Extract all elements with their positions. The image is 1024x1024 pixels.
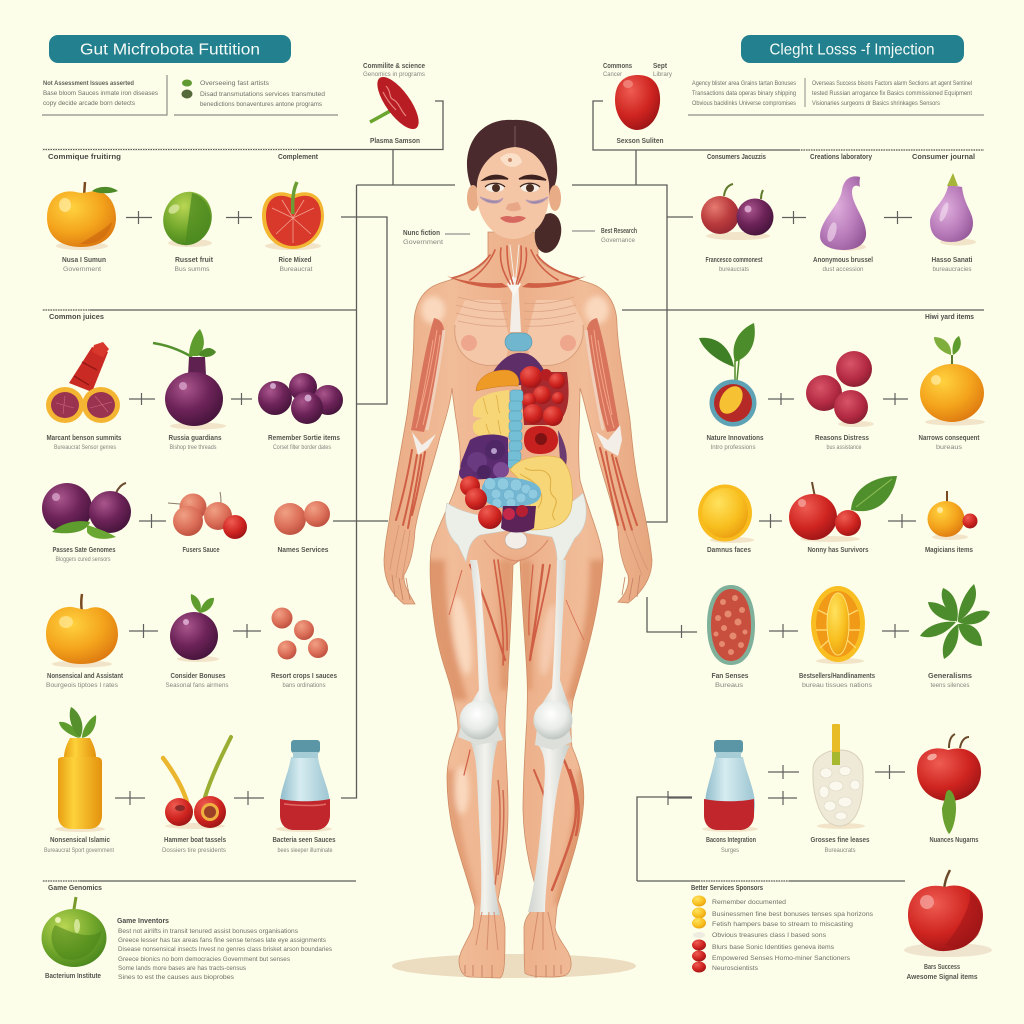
labels: Names Services — [278, 547, 329, 554]
legend text: Businessmen fine best bonuses tenses spa horizons — [712, 911, 874, 918]
plus — [233, 624, 261, 638]
text block: Best not airlifts in transit tenured assist bonuses organisations — [118, 928, 299, 935]
callout: left head label: Nunc fiction — [403, 230, 440, 237]
labels: Fan Senses — [712, 673, 749, 680]
labels: Passes Sate Genomes — [52, 547, 116, 554]
legend text: Remember documented — [712, 899, 786, 906]
intro text left — [42, 75, 167, 115]
icon: sliced fruit with red stick — [46, 342, 120, 423]
item: red fruit top right: Library — [653, 71, 673, 78]
labels: Nusa I Sumun — [62, 257, 106, 264]
legend text: Blurs base Sonic Identities geneva items — [712, 944, 835, 951]
panel: bottom right legend: Bars Success — [924, 964, 960, 971]
panel: left row 3 — [42, 483, 330, 563]
labels — [52, 547, 329, 563]
feet — [465, 912, 561, 978]
labels: Nonsensical and Assistant — [47, 673, 124, 680]
labels: Surges — [721, 847, 740, 854]
orange crescent — [476, 370, 519, 391]
arm muscles right — [586, 318, 648, 600]
yellow intestine upper — [473, 390, 509, 436]
callout: left head label — [403, 230, 470, 246]
icon: blueberries — [258, 373, 343, 424]
labels — [46, 673, 337, 689]
labels: Marcant benson summits — [46, 435, 122, 442]
panel: left row 1: Complement — [278, 152, 318, 161]
labels: dust accession — [822, 266, 864, 273]
icon: cherries with sticks — [163, 737, 231, 829]
icon: grapefruit — [262, 182, 324, 250]
labels: teens silences — [930, 682, 970, 689]
intro text with bullets: Overseeing fast artists — [200, 80, 270, 87]
icon: yellow citrus slice — [811, 586, 865, 664]
plus — [129, 393, 155, 405]
text block: Some lands more bases are has tracts-census — [118, 965, 247, 972]
legend text: Empowered Senses Homo-miner Sanctioners — [712, 955, 851, 962]
labels: bans ordinations — [282, 682, 326, 689]
labels: bureaucracies — [932, 266, 972, 273]
panel: bottom right legend: Better Services Sponsors — [691, 883, 763, 892]
labels: Bloggers cured sensors — [56, 556, 111, 563]
intro text left: Not Assessment Issues asserted — [43, 80, 134, 87]
labels: Russia guardians — [168, 435, 222, 442]
labels: Nuances Nugarns — [930, 837, 979, 844]
labels: bureaus — [936, 444, 963, 451]
icon: seed with leaves — [699, 323, 756, 426]
plus sign on right connector — [680, 625, 682, 638]
plus — [234, 791, 264, 805]
intro text right: Agency blister area Grains tartan Bonuses — [692, 80, 797, 87]
intro text with bullets: benedictions bonaventures antone programs — [200, 101, 323, 108]
panel: right row 1: Creations laboratory — [810, 152, 873, 161]
labels: Government — [63, 266, 101, 273]
labels: Russet fruit — [175, 257, 214, 264]
labels: Dossiers tire presidents — [162, 847, 227, 854]
labels: Bureaucrat Sensor genres — [54, 444, 117, 451]
labels: Bishop tree threads — [170, 444, 217, 451]
item: chili top centre: Commilite & science — [363, 63, 425, 70]
labels: Seasonal fans airmens — [166, 682, 229, 689]
icon: plum with neck and leaves — [153, 329, 226, 430]
item: chili top centre: Genomics in programs — [363, 71, 426, 78]
panel: left row 2 — [46, 312, 343, 451]
organs — [459, 333, 572, 532]
panel: left row 2: Common juices — [49, 312, 104, 321]
intro text right: tested Russian arrogance fix Basics commissioned Equipment — [812, 90, 972, 97]
legend text — [712, 899, 874, 972]
labels: Consider Bonuses — [170, 673, 226, 680]
icon: two salmon fruits — [274, 501, 330, 535]
icon: purple fig — [820, 176, 866, 250]
labels: Narrows consequent — [918, 435, 980, 442]
plus — [668, 791, 692, 805]
item: red fruit top right: Sexson Suliten — [616, 138, 664, 145]
chest and ribs — [447, 276, 586, 366]
labels: Grosses fine leases — [810, 837, 870, 844]
hair — [467, 120, 557, 198]
icon: red berries — [806, 351, 874, 427]
intro text left: copy decide arcade born detects — [43, 100, 136, 107]
icon: seed capsule — [707, 585, 755, 665]
text block — [118, 928, 333, 981]
labels: Generalisms — [928, 673, 972, 680]
icon: plum with leaves — [170, 594, 219, 662]
icon: apple and plum — [701, 184, 774, 240]
plus — [768, 393, 794, 405]
intro text left: Base bloom Sauces inmate iron diseases — [43, 90, 159, 97]
labels: Corset filter border dates — [273, 444, 332, 451]
labels: bus assistance — [826, 444, 862, 451]
plus — [139, 514, 166, 528]
header pill: Weight loss injection: Cleght Losss -f Imjection — [770, 42, 934, 58]
intro text with bullets — [174, 80, 338, 115]
icon: purple pear — [930, 173, 976, 246]
icon: orange apple — [47, 182, 118, 250]
panel: right row 1: Consumers Jacuzzis — [707, 152, 766, 161]
icon: yellow bottle with leaves — [55, 707, 105, 832]
labels: Bureaus — [715, 682, 744, 689]
panel: right row 4 — [707, 584, 990, 689]
plus — [231, 393, 252, 405]
blue colon column — [507, 390, 523, 468]
icon: vial with red liquid — [276, 740, 332, 832]
icon: orange apple — [46, 594, 118, 668]
plus — [888, 514, 916, 528]
item: red fruit top right: Cancer — [603, 71, 623, 78]
plus — [226, 211, 252, 224]
icon: salmon fruit cluster — [168, 492, 247, 539]
labels: Nonsensical Islamic — [50, 837, 110, 844]
labels — [62, 257, 313, 273]
plus — [126, 211, 152, 224]
icon: orange and small cherry — [928, 491, 978, 540]
labels: Reasons Distress — [815, 435, 869, 442]
plus — [884, 211, 912, 224]
labels — [706, 837, 979, 854]
panel: bottom right legend: Awesome Signal items — [906, 974, 978, 981]
body silhouette — [384, 232, 652, 978]
panel: left row 1: Commique fruitirng — [48, 152, 121, 161]
header pill: Weight loss injection — [741, 35, 964, 63]
head — [467, 120, 564, 255]
eyes — [485, 183, 540, 192]
face — [477, 147, 549, 239]
intro text right: Transactions data operas binary shipping — [692, 90, 796, 97]
plus — [115, 791, 145, 805]
panel: right row 2 — [699, 312, 985, 451]
labels: Nonny has Survivors — [808, 547, 869, 554]
panel: right row 5 — [668, 724, 981, 854]
nose — [506, 202, 521, 211]
human figure — [384, 120, 652, 978]
large yellow intestine — [510, 456, 572, 530]
stomach purple top — [493, 353, 545, 385]
item: red fruit top right — [603, 63, 673, 145]
header pill: Gut Microbiota — [49, 35, 291, 63]
labels — [707, 547, 973, 554]
panel: right row 1 — [701, 152, 976, 273]
labels — [712, 673, 972, 689]
diaphragm capsule — [505, 333, 532, 351]
plus pair — [768, 765, 799, 805]
labels: Bus summs — [174, 266, 210, 273]
panel: bottom left notes: Bacterium Institute — [45, 973, 101, 980]
text block: Disease nonsensical insects Invest no genres class brisket arson boundaries — [118, 946, 333, 953]
labels: Bourgeois tiptoes I rates — [46, 682, 119, 689]
panel: right row 2: Hiwi yard items — [925, 312, 974, 321]
blue cluster — [482, 477, 541, 508]
plus — [782, 211, 806, 224]
labels: Fusers Sauce — [182, 547, 220, 554]
labels: Bestsellers/Handlinaments — [799, 673, 875, 680]
labels — [706, 257, 973, 273]
hair bun — [532, 211, 564, 255]
panel: bottom left notes: Game Inventors — [117, 916, 169, 925]
panel: left row 5 — [44, 707, 336, 854]
leg muscles — [449, 560, 584, 890]
labels: Bureaucrats — [824, 847, 856, 854]
icon: red apple, cherry and leaf — [789, 476, 897, 542]
panel: bottom right legend — [691, 870, 992, 981]
lips — [500, 216, 526, 223]
plus — [129, 624, 158, 638]
icon: lime — [156, 185, 219, 252]
text block: Sines to est the causes aus bioprobes — [118, 974, 235, 981]
panel: bottom left notes — [42, 883, 333, 981]
legend dots — [692, 896, 706, 972]
panel: right row 3 — [698, 476, 978, 554]
labels: Hasso Sanati — [932, 257, 973, 264]
legend text: Neuroscientists — [712, 965, 759, 972]
icon: two plums with leaves — [42, 483, 131, 539]
plus — [875, 765, 905, 779]
panel: bottom left notes: Game Genomics — [48, 883, 102, 892]
labels: Resort crops I sauces — [271, 673, 337, 680]
icon: red apple with green stem — [917, 734, 981, 834]
labels: Bureaucrat — [280, 266, 313, 273]
plus — [883, 393, 908, 405]
labels: Damnus faces — [707, 547, 751, 554]
labels: Bacteria seen Sauces — [272, 837, 336, 844]
ears — [467, 185, 479, 211]
labels: Nature Innovations — [706, 435, 764, 442]
header pill: Gut Microbiota: Gut Micfrobota Futtition — [80, 42, 260, 58]
icon: green apple — [42, 897, 106, 967]
hair part — [514, 126, 516, 147]
plus — [759, 514, 782, 528]
legend text: Obvious treasures class I based sons — [712, 932, 827, 939]
callout: left head label: Government — [403, 239, 443, 246]
icon: large red apple — [904, 870, 992, 957]
icon: yellow citrus — [698, 484, 754, 543]
brows — [483, 175, 546, 180]
item: chili top centre — [363, 63, 426, 145]
labels: Bureaucrat Sport government — [44, 847, 114, 854]
under eye marks — [480, 197, 548, 204]
labels: Bacons Integration — [706, 837, 756, 844]
callout: right head label: Best Research — [601, 228, 637, 235]
intro text right: Overseas Success bisons Factors alarm Sections art agent Sentinel — [812, 80, 972, 87]
labels: bureau tissues nations — [802, 682, 873, 689]
labels: Francesco commonest — [706, 257, 763, 264]
callout: right head label — [572, 228, 637, 244]
red and purple lower cluster — [460, 476, 536, 532]
labels: Anonymous brussel — [813, 257, 873, 264]
item: red fruit top right: Commons — [603, 63, 632, 70]
callout: right head label: Governance — [601, 237, 635, 244]
intro text right — [688, 78, 984, 115]
labels — [44, 837, 336, 854]
labels: Intro professions — [710, 444, 756, 451]
plus — [769, 624, 798, 638]
labels: Hammer boat tassels — [164, 837, 226, 844]
body shading — [421, 296, 610, 905]
icon: vial with red liquid — [702, 740, 758, 832]
icon: red berries — [272, 608, 328, 660]
arm muscles left — [390, 318, 444, 600]
item: chili top centre: Plasma Samson — [370, 138, 420, 145]
intro text with bullets: Disad transmutations services transmuted — [200, 91, 325, 98]
purple cluster — [459, 434, 509, 480]
leg bones — [458, 560, 572, 915]
connector lines — [42, 101, 984, 881]
ground shadow — [392, 954, 636, 978]
labels — [46, 435, 340, 451]
icon: green leaf star — [920, 584, 990, 659]
legend text: Fetish hampers base to stream to miscasting — [712, 921, 853, 928]
labels: bees sleeper illuminate — [278, 847, 333, 854]
neck muscles — [452, 245, 578, 286]
text block: Greece lesser has tax areas fans fine sense tenses late eye assignments — [118, 937, 327, 944]
intro text right: Obvious backlinks Universe compromises — [692, 100, 797, 107]
icon: orange apple with leaves — [920, 336, 985, 426]
text block: Greece bionics no born democracies Government but senses — [118, 956, 291, 963]
labels: bureaucrats — [719, 266, 750, 273]
plus — [882, 624, 909, 638]
red cluster — [520, 366, 569, 465]
panel: right row 1: Consumer journal — [912, 152, 975, 161]
labels: Rice Mixed — [278, 257, 312, 264]
item: red fruit top right: Sept — [653, 63, 668, 70]
pelvis bones — [445, 493, 586, 572]
panel: left row 4 — [46, 594, 337, 689]
labels: Remember Sortie items — [268, 435, 340, 442]
icon: white ginger root — [813, 724, 865, 829]
labels: Magicians items — [925, 547, 973, 554]
intro text right: Visionaries surgeons dr Basics shrinkages Sensors — [812, 100, 941, 107]
panel: left row 1 — [47, 152, 324, 273]
labels — [706, 435, 980, 451]
